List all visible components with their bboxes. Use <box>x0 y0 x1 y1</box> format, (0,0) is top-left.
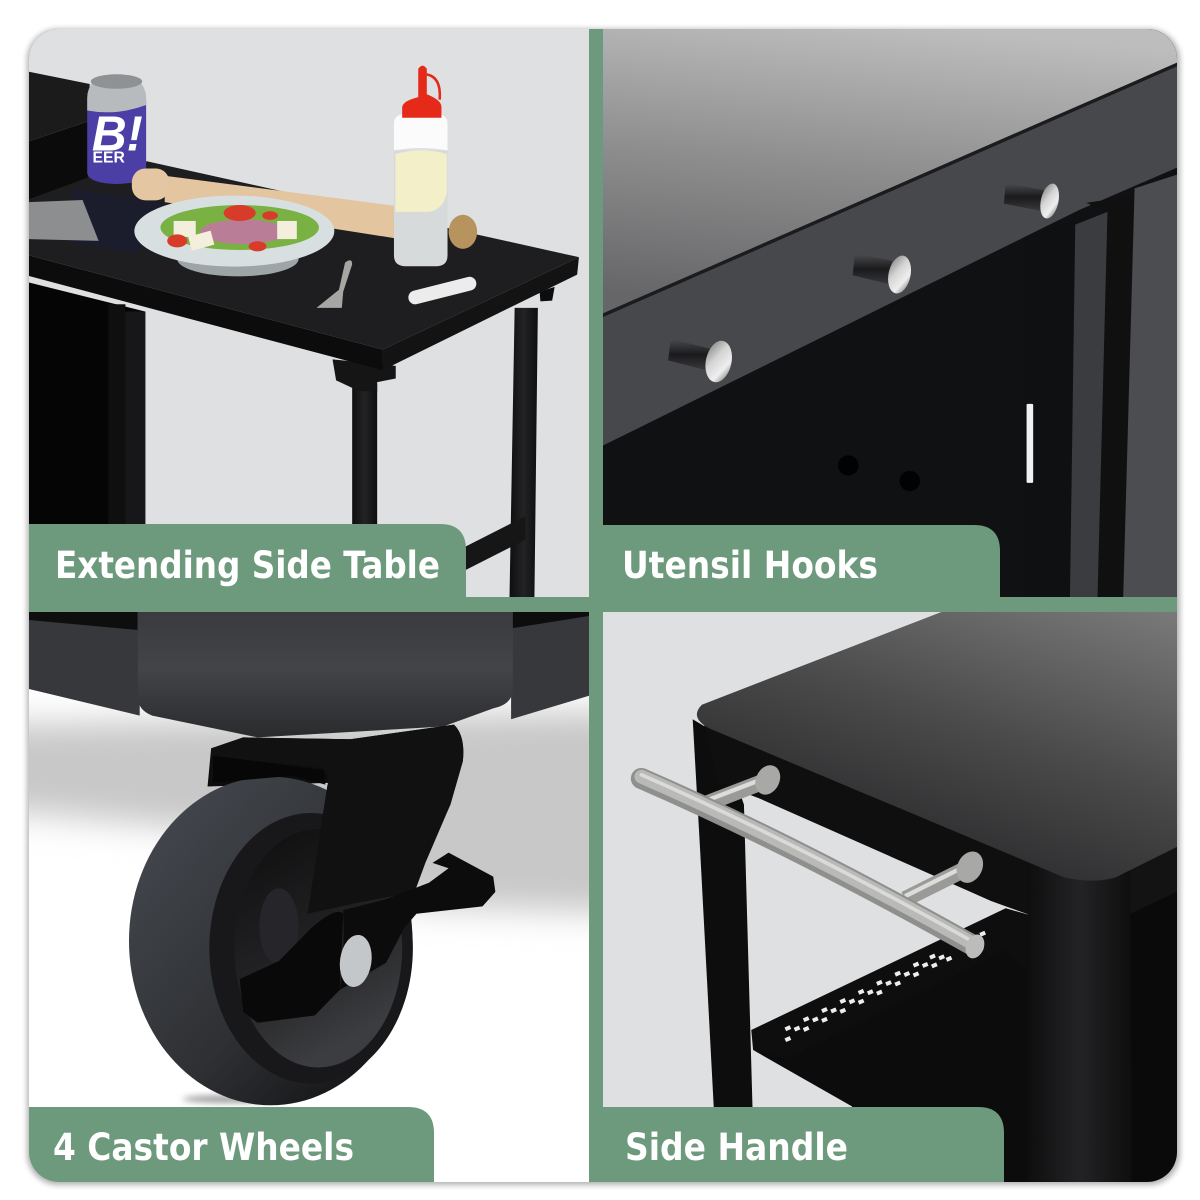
panel: extending side table <box>29 29 589 609</box>
floor shadow <box>0 710 643 914</box>
fork <box>316 260 352 308</box>
label: Utensil Hooks: Utensil Hooks <box>622 544 878 587</box>
label: 4 Castor Wheels: 4 Castor Wheels <box>53 1126 354 1169</box>
side handle bar <box>641 761 988 961</box>
castor wheel <box>129 725 495 1105</box>
bottle <box>394 66 448 266</box>
grill block <box>29 72 90 199</box>
front rail <box>603 56 1196 446</box>
cart body <box>29 282 146 524</box>
cart base <box>29 612 608 737</box>
hook 3 <box>1004 184 1059 218</box>
divider horizontal <box>29 597 1177 612</box>
panel: castor wheels <box>29 612 589 1182</box>
can: B! <box>92 107 143 161</box>
screws <box>838 455 920 491</box>
door side <box>1024 174 1177 597</box>
label: 4 Castor Wheels <box>29 1107 434 1182</box>
label: Side Handle: Side Handle <box>625 1126 848 1169</box>
panel: utensil hooks <box>603 29 1196 609</box>
spatula <box>29 200 99 241</box>
wheel contact shadow <box>183 1095 275 1103</box>
right apron <box>1130 846 1177 913</box>
panel: side handle <box>603 608 1196 1194</box>
tray back panel <box>753 939 1031 1194</box>
label: Extending Side Table: Extending Side Table <box>55 544 440 587</box>
cart top <box>697 608 1196 881</box>
label: Utensil Hooks <box>603 525 1000 597</box>
hook 2 <box>852 256 911 294</box>
top surface <box>603 29 1196 313</box>
plate with salad <box>134 196 334 276</box>
hook 1 <box>668 340 732 382</box>
rear leg <box>692 719 752 1107</box>
front leg <box>1028 859 1132 1194</box>
leg bracket <box>333 359 396 391</box>
rolling pin <box>132 168 477 249</box>
divider vertical <box>589 29 603 1182</box>
right back frame <box>1130 892 1177 1182</box>
label: Extending Side Table <box>29 524 466 597</box>
can <box>87 74 146 184</box>
can: EER <box>93 149 125 166</box>
label: Side Handle <box>603 1107 1004 1182</box>
hinge slit <box>1027 404 1033 483</box>
near table leg <box>352 384 378 524</box>
apron <box>704 725 1028 914</box>
far table leg <box>465 287 555 609</box>
perforated rail <box>751 908 1031 1059</box>
table top <box>29 161 579 370</box>
handle slot <box>408 276 476 304</box>
